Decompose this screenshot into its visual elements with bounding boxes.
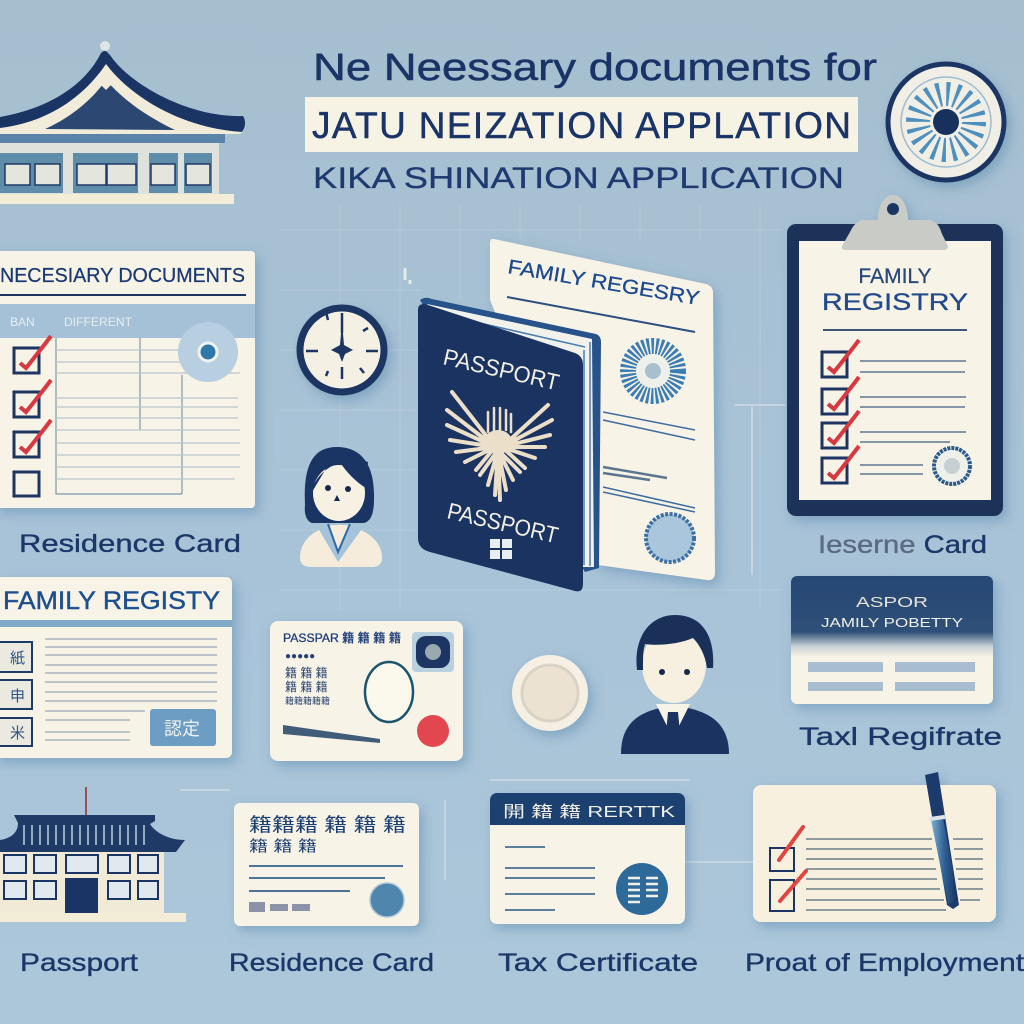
panel: small card	[791, 576, 993, 704]
panel: clipboard family registry	[787, 195, 1003, 516]
panel: necessary documents: NECESIARY DOCUMENTS	[0, 265, 245, 287]
icon: clip	[842, 195, 948, 250]
panel: family registry card: 紙	[10, 650, 25, 667]
icon: pen	[925, 772, 959, 909]
panel: clipboard family registry: FAMILY	[858, 265, 932, 288]
icon: woman	[300, 447, 382, 567]
label: residence card: Residence Card	[19, 530, 241, 558]
icon: man	[621, 615, 729, 754]
panel: family registry card: 米	[10, 725, 25, 742]
passport: PASSPORT	[445, 498, 561, 548]
title highlight band: JATU NEIZATION APPLATION	[312, 105, 851, 146]
panel: small card: JAMILY POBETTY	[821, 615, 963, 630]
icon: building bottom	[0, 787, 186, 922]
passport	[418, 298, 601, 591]
label: tax certificate: Tax Certificate	[498, 949, 698, 977]
card: tax certificate: 開 籍 籍 RERTTK	[503, 803, 675, 821]
panel: necessary documents: BAN	[10, 315, 35, 329]
label: passport: Passport	[20, 949, 138, 977]
document: family registry behind passport: FAMILY REGESRY	[506, 256, 701, 310]
card: residence: 籍籍籍 籍 籍 籍	[249, 814, 406, 836]
id card: 籍 籍 籍	[285, 679, 328, 694]
stamp: 認定	[164, 719, 200, 739]
icon: clipboard seal	[934, 448, 970, 484]
id card: ●●●●●	[285, 651, 315, 662]
panel: clipboard family registry: REGISTRY	[822, 289, 968, 316]
icon: emblem	[888, 64, 1004, 180]
small marks	[405, 268, 410, 284]
id card: 籍籍籍籍籍	[285, 695, 330, 706]
panel: family registry card: FAMILY REGISTY	[3, 587, 220, 615]
label: proof of employment: Proat of Employment	[745, 949, 1024, 977]
card: residence	[234, 803, 419, 926]
icon: clock	[300, 308, 384, 392]
card: residence: 籍 籍 籍	[249, 838, 317, 855]
id card	[270, 621, 463, 761]
checklist icons	[14, 336, 51, 496]
label: reserve card: Ieserne Card	[818, 531, 987, 559]
title	[305, 47, 877, 195]
icon: registry seal	[628, 346, 678, 396]
icon: round stamp	[512, 655, 588, 731]
id card: 籍 籍 籍	[285, 665, 328, 680]
panel: family registry card: 申	[10, 688, 25, 705]
icon: traditional building top	[0, 41, 245, 204]
card: tax certificate	[490, 793, 685, 924]
icon: passport wings emblem	[447, 392, 552, 500]
panel: necessary documents	[0, 251, 255, 508]
document: family registry behind passport	[490, 239, 715, 580]
icon: seal	[178, 322, 238, 382]
id card: PASSPAR 籍 籍 籍 籍	[283, 630, 401, 645]
panel: family registry card	[0, 577, 232, 758]
card: proof of employment	[753, 772, 996, 922]
title: KIKA SHINATION APPLICATION	[313, 162, 844, 195]
panel: necessary documents: DIFFERENT	[64, 315, 133, 329]
panel: small card: ASPOR	[856, 594, 928, 611]
passport: PASSPORT	[441, 344, 562, 395]
label: residence card: Residence Card	[229, 949, 434, 977]
title: Ne Neessary documents for	[313, 47, 877, 89]
label: taxi registrate: Taxl Regifrate	[799, 723, 1002, 751]
icon: round stamp	[646, 514, 694, 562]
stamp	[150, 709, 216, 746]
